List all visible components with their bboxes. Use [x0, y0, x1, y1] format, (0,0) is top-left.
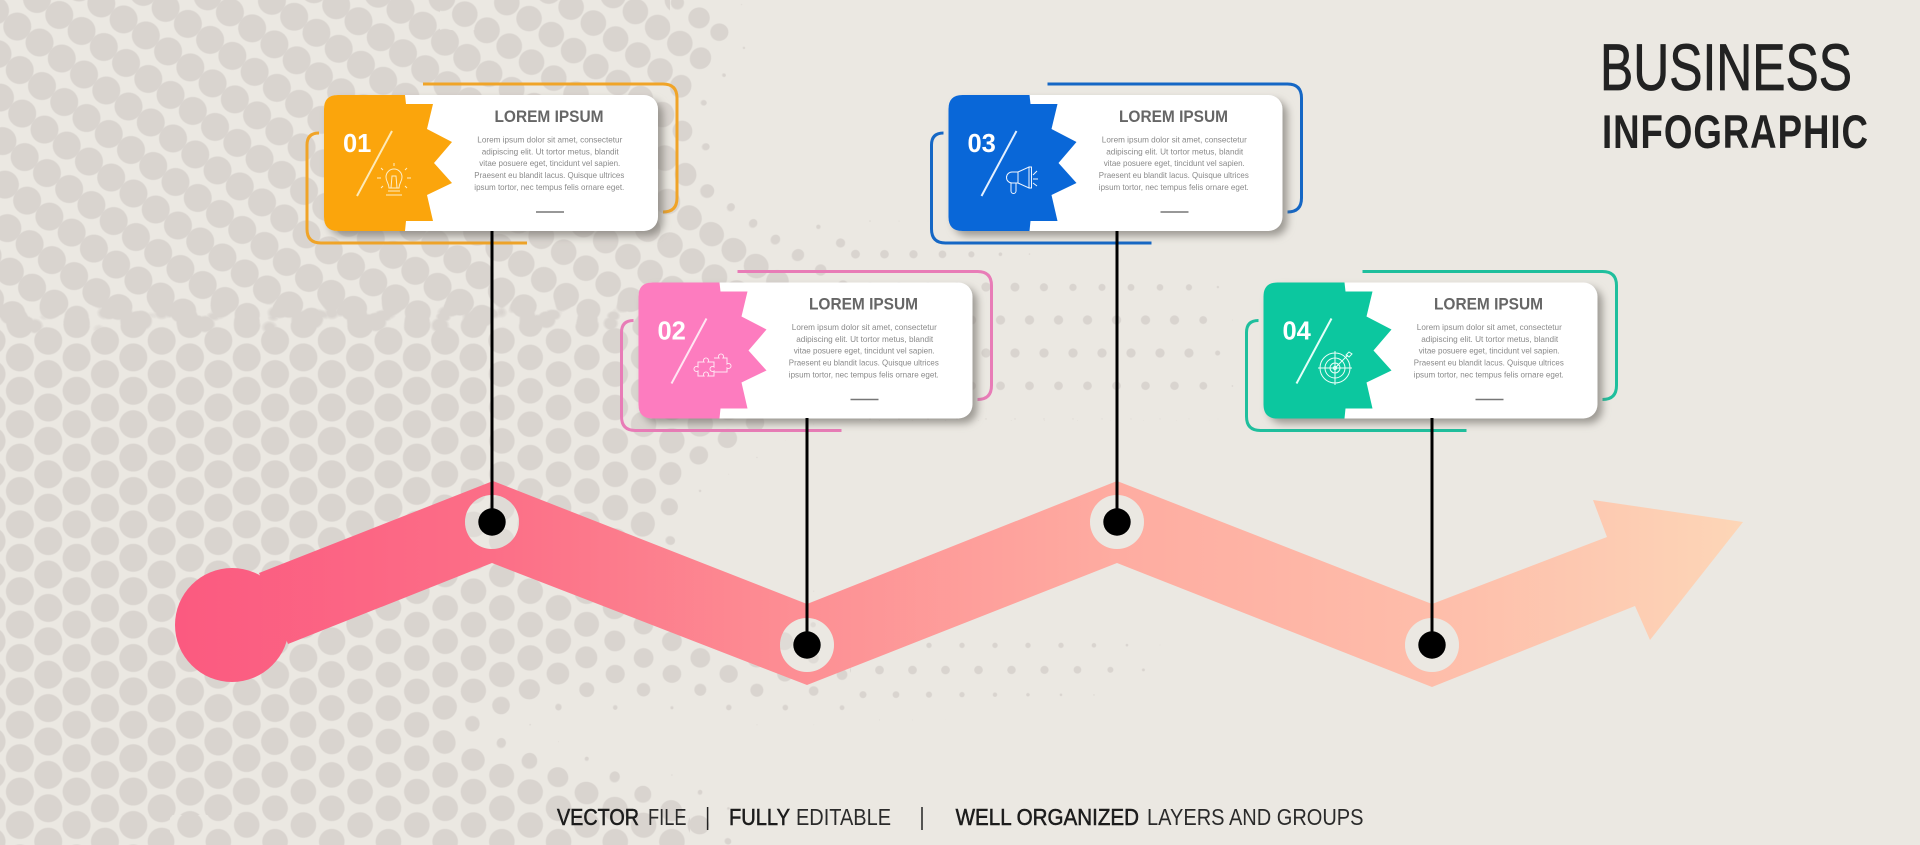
colored tab: [324, 95, 452, 231]
body text: Lorem ipsum dolor sit amet, consectetur: [477, 135, 622, 145]
footer tagline: WELL ORGANIZED: [956, 804, 1139, 830]
heading: LOREM IPSUM: [1434, 296, 1543, 314]
bracket outline: [1246, 272, 1616, 430]
icon: megaphone: [1006, 167, 1038, 194]
timeline arrow band: [175, 481, 1743, 687]
slash: [357, 131, 392, 196]
body text: adipiscing elit. Ut tortor metus, blandit: [796, 334, 934, 344]
footer tagline: LAYERS AND GROUPS: [1147, 804, 1364, 830]
connector node 02: [780, 418, 834, 672]
white card: [638, 282, 972, 418]
colored tab: [1264, 282, 1392, 418]
heading: LOREM IPSUM: [1119, 108, 1228, 126]
white card: [948, 95, 1282, 231]
connector node 03: [1090, 231, 1144, 549]
title: INFOGRAPHIC: [1602, 106, 1868, 158]
body text: adipiscing elit. Ut tortor metus, blandit: [482, 146, 619, 156]
step number: 02: [658, 318, 686, 346]
body text: Lorem ipsum dolor sit amet, consectetur: [1417, 322, 1562, 332]
body text: Praesent eu blandit lacus. Quisque ultrices: [474, 170, 625, 180]
title: [1600, 30, 1868, 158]
footer tagline: VECTOR: [557, 804, 639, 830]
body text: vitae posuere eget, tincidunt vel sapien.: [1104, 158, 1245, 168]
slash: [1296, 318, 1332, 384]
body text: ipsum tortor, nec tempus felis ornare eget.: [789, 370, 939, 380]
body text: Lorem ipsum dolor sit amet, consectetur: [1102, 135, 1247, 145]
body text: Praesent eu blandit lacus. Quisque ultrices: [1414, 358, 1564, 368]
body text: [1099, 135, 1249, 192]
bracket outline: [622, 272, 992, 430]
footer tagline: FULLY: [729, 804, 790, 830]
heading: LOREM IPSUM: [809, 296, 918, 314]
body text: vitae posuere eget, tincidunt vel sapien.: [479, 158, 620, 168]
step number: 04: [1282, 318, 1312, 346]
connector node 04: [1405, 418, 1459, 672]
panel: step 02: [622, 272, 992, 430]
footer tagline: [557, 804, 1364, 830]
body text: vitae posuere eget, tincidunt vel sapien.: [1419, 346, 1560, 356]
panel: step 01: [307, 84, 677, 243]
body text: vitae posuere eget, tincidunt vel sapien.: [794, 346, 935, 356]
colored tab: [948, 95, 1076, 231]
body text: Praesent eu blandit lacus. Quisque ultrices: [789, 358, 939, 368]
bracket outline: [932, 84, 1302, 243]
body text: ipsum tortor, nec tempus felis ornare eget.: [474, 182, 624, 192]
body text: [474, 135, 625, 192]
body text: adipiscing elit. Ut tortor metus, blandit: [1106, 146, 1244, 156]
icon: puzzle: [694, 354, 731, 376]
step number: 03: [968, 130, 996, 158]
heading: LOREM IPSUM: [494, 108, 604, 126]
panel: step 04: [1246, 272, 1616, 430]
body text: adipiscing elit. Ut tortor metus, blandit: [1421, 334, 1559, 344]
bracket outline: [307, 84, 677, 243]
white card: [1264, 282, 1598, 418]
slash: [672, 318, 706, 384]
background halftone dots: [0, 0, 1233, 845]
footer tagline: FILE: [648, 804, 686, 830]
step number: 01: [343, 130, 371, 158]
icon: target: [1318, 351, 1352, 385]
white card: [324, 95, 658, 231]
body text: Lorem ipsum dolor sit amet, consectetur: [792, 322, 937, 332]
footer tagline: EDITABLE: [796, 804, 891, 830]
body text: [1414, 322, 1564, 380]
panel: step 03: [932, 84, 1302, 243]
body text: [789, 322, 939, 380]
body text: ipsum tortor, nec tempus felis ornare eget.: [1414, 370, 1564, 380]
body text: ipsum tortor, nec tempus felis ornare eget.: [1099, 182, 1249, 192]
icon: light bulb: [377, 163, 411, 195]
connector node 01: [465, 231, 519, 549]
slash: [982, 131, 1016, 196]
colored tab: [638, 282, 766, 418]
body text: Praesent eu blandit lacus. Quisque ultrices: [1099, 170, 1249, 180]
